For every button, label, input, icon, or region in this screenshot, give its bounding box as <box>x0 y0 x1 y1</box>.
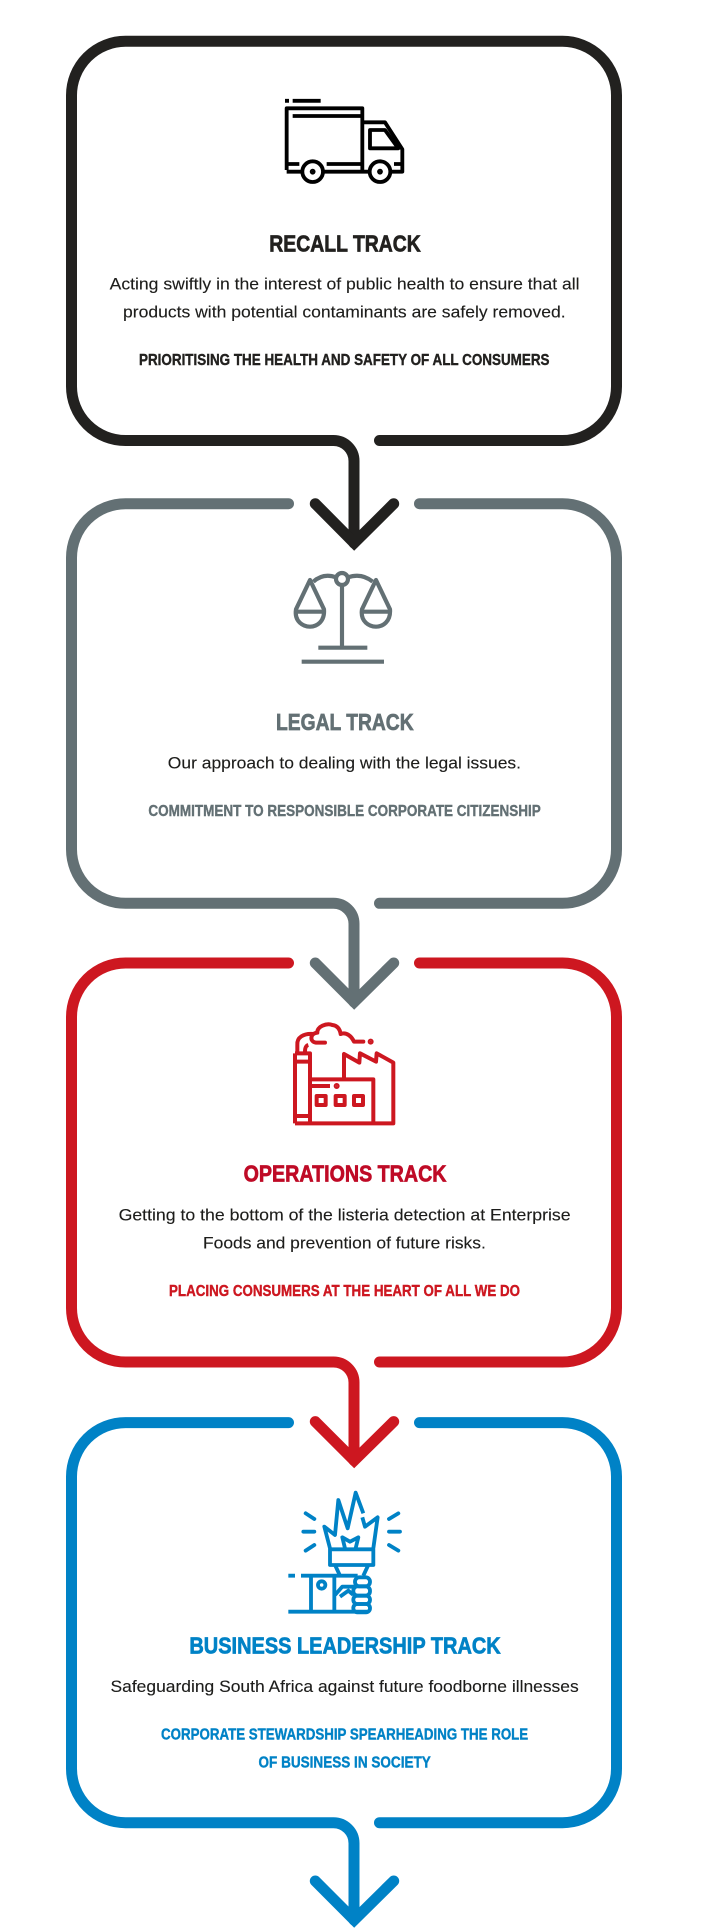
text: operations description: Foods and prevention of future risks. <box>203 1234 486 1252</box>
text: recall description: products with potential contaminants are safely removed. <box>123 303 566 321</box>
text: legal description: Our approach to dealing with the legal issues. <box>168 754 521 772</box>
text: operations description <box>119 1207 571 1252</box>
heading: recall track: RECALL TRACK <box>269 230 421 256</box>
tagline: operations: PLACING CONSUMERS AT THE HEART OF ALL WE DO <box>169 1283 520 1300</box>
recall outline and connector arrow <box>72 41 616 543</box>
tagline: business: OF BUSINESS IN SOCIETY <box>258 1755 431 1772</box>
tagline: legal: COMMITMENT TO RESPONSIBLE CORPORATE CITIZENSHIP <box>148 803 541 820</box>
icon: delivery truck <box>285 101 402 182</box>
panel: business leadership track <box>72 1423 616 1920</box>
icon: scales of justice <box>296 573 390 662</box>
operations outline and connector arrow <box>72 963 616 1460</box>
text: recall description: Acting swiftly in the interest of public health to ensure that all <box>110 275 580 293</box>
panel: legal track <box>72 504 616 1002</box>
heading: legal track: LEGAL TRACK <box>276 709 414 735</box>
business outline and connector arrow <box>72 1423 616 1920</box>
text: recall description <box>110 275 580 321</box>
icon: torch held in hand <box>288 1493 400 1612</box>
tagline: business: CORPORATE STEWARDSHIP SPEARHEADING THE ROLE <box>161 1727 528 1744</box>
tagline: business <box>161 1727 528 1772</box>
panel: operations track <box>72 963 616 1460</box>
text: business description: Safeguarding South Africa against future foodborne illnesses <box>110 1678 579 1696</box>
icon: factory <box>295 1024 393 1123</box>
text: operations description: Getting to the bottom of the listeria detection at Enterprise <box>119 1207 571 1225</box>
heading: operations track: OPERATIONS TRACK <box>244 1161 447 1187</box>
heading: business leadership track: BUSINESS LEADERSHIP TRACK <box>189 1633 501 1659</box>
tagline: recall: PRIORITISING THE HEALTH AND SAFETY OF ALL CONSUMERS <box>139 352 550 369</box>
panel: recall track <box>72 41 616 543</box>
legal outline and connector arrow <box>72 504 616 1002</box>
